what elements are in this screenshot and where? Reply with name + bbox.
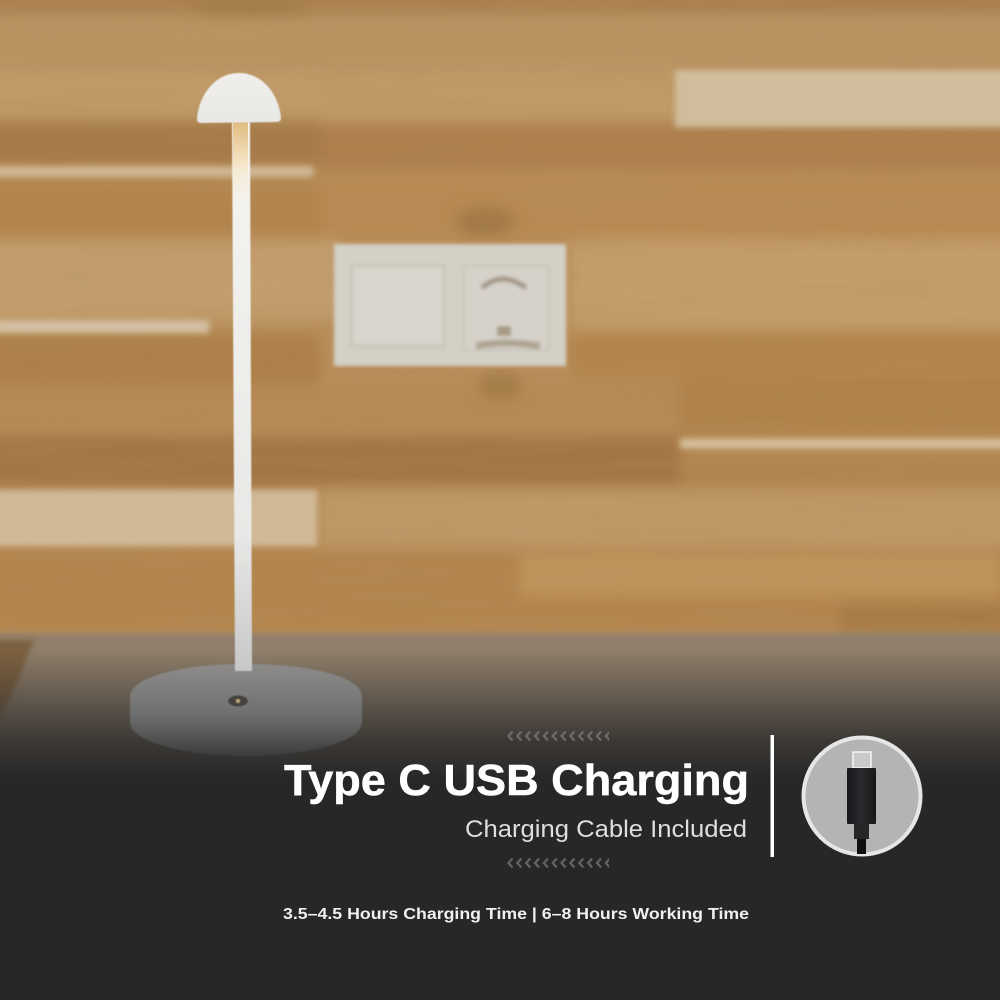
title: Type C USB Charging [284,756,749,805]
pole glow [233,122,248,214]
subtitle: Charging Cable Included [465,816,747,843]
wood knots [190,2,522,399]
lamp shade dome [197,73,281,123]
decorative chevrons top [507,731,609,741]
table surface [0,633,1000,803]
vertical divider [770,735,774,857]
lamp base [130,664,362,756]
light planks [0,70,1000,546]
icon: USB-C cable [804,738,920,854]
dark lower panel [0,780,1000,1000]
wood grain texture [0,0,1000,634]
dark gradient overlay [0,650,1000,780]
decorative chevrons bottom [507,858,609,868]
lamp pole [232,122,252,671]
charging and working time: 3.5–4.5 Hours Charging Time | 6–8 Hours Working Time [283,906,749,923]
lamp [130,73,362,756]
wall socket plate [334,244,566,366]
background: wood wall [0,0,1000,640]
